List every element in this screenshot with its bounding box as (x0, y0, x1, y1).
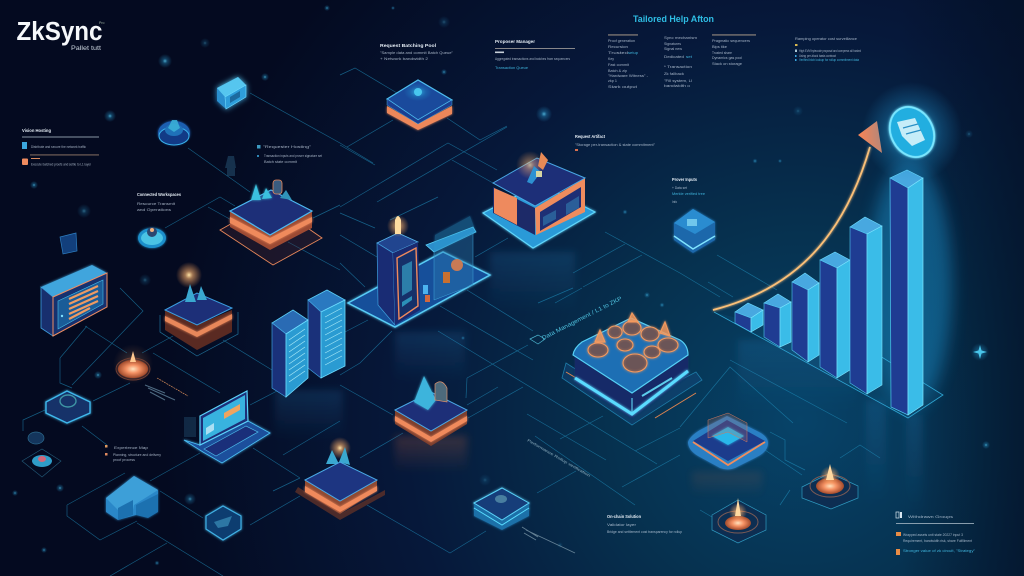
block: modular cube (106, 476, 158, 520)
server 1 (272, 310, 308, 397)
text block: column 3: Dynamics gas pool (712, 56, 742, 60)
text block: top centre note: Aggregated transactions and batches from sequencers (495, 57, 570, 61)
bar 6 (890, 170, 923, 415)
icon: document badge (60, 233, 77, 254)
text block: column 3: Trusted share (712, 51, 732, 55)
text block: upper node note: "Requester Hosting" (263, 145, 312, 149)
text block: column 1: Key (608, 57, 614, 61)
glass box (423, 216, 476, 302)
text block: upper node note: Transaction inputs and prover signature set (264, 154, 322, 158)
title: ZkSync logo: Pro (99, 21, 104, 25)
node: small disc (138, 227, 166, 248)
text block: lower left note: Experience Map (114, 446, 148, 450)
text block: column 1: Fast commit (608, 63, 629, 67)
icon: glowing coin (862, 82, 962, 182)
node: lower hex badge (206, 506, 241, 540)
text block: lower centre note: Validator layer (607, 523, 637, 527)
text block: top right note: Verified blob lookup for rollup commitment data (799, 58, 859, 62)
text block: column 2: set (686, 55, 692, 59)
text block: connected workspaces: Resource Transmit (137, 202, 175, 206)
text block: left legend (22, 128, 99, 166)
text block: bottom right legend: Requirement, bandwidth risk, share Fulfillment (903, 539, 972, 543)
text block: small cube note: Prover Inputs (672, 177, 697, 182)
text block: upper node note: Batch state commit (264, 160, 297, 164)
text block: top right note: High EVM bytecode proposal and compress all hosted (799, 49, 861, 53)
icon: disc node (158, 120, 190, 145)
text block: column 2: Zk fallback (664, 72, 684, 76)
icon: small blue cube (674, 209, 715, 253)
text block: top chip note: + Network bandwidth 2 (380, 57, 428, 61)
text block: column 2: * Transaction (664, 65, 692, 69)
text block: column 2: Signatures (664, 42, 681, 46)
text block: column 2: "Fill system, Ll (664, 79, 692, 83)
icon: blue data cube (217, 77, 246, 109)
text block: column 1 (608, 34, 649, 89)
text block: small cube note: Info (672, 200, 677, 204)
building on platform (483, 151, 595, 312)
big platform with orange flame cluster (562, 313, 702, 425)
server rack pair (272, 290, 345, 440)
text block: top chip note: Request Batching Pool (380, 43, 436, 48)
text block: small cube note: Merkle verified tree (672, 192, 705, 196)
bar reflections (738, 340, 923, 515)
text block: lower centre note: Bridge and settlement cost transparency for rollup (607, 530, 682, 534)
text block: top centre note (495, 39, 575, 70)
text block: building note (575, 134, 656, 151)
text block: left legend: Distribute and secure the network traffic (31, 145, 86, 149)
text block: column 1: Proof generation (608, 39, 635, 43)
flame node lower (712, 498, 766, 543)
chart: rising 3D bar chart (714, 160, 952, 515)
text block: bottom right legend: Stronger value of zk circuit, "Strategy" (903, 549, 976, 553)
title: ZkSync logo: ZkSync (16, 18, 102, 46)
text block: column 1: Trusted (608, 51, 628, 55)
text block: top right note: Ramping operator cost surveillance (795, 37, 857, 41)
panel: window screen (41, 265, 107, 336)
text block: column 1: Recursion (608, 45, 628, 49)
text block: column 2: Sync mechanism (664, 36, 697, 40)
tower body (377, 233, 420, 325)
isometric chip platform (387, 80, 452, 130)
text block: connected workspaces (137, 192, 181, 212)
text block: top chip note (380, 43, 454, 61)
laptop (184, 391, 270, 463)
text block: column 2: Dedicated (664, 55, 684, 59)
rotated caption: centre line: Performance Rollup verification (526, 438, 591, 478)
orange dashed label (157, 378, 188, 396)
text block: top chip note: "Sample data and commit Batch Queue" (380, 51, 454, 55)
text block: column 2: bandwidth o (664, 84, 690, 88)
text block: column 1: zkp 1 (608, 79, 617, 83)
text block: lower centre note: On-chain Solution (607, 514, 641, 519)
glow behind chart (868, 160, 952, 410)
text block: column 3: Pragmatic sequencers (712, 39, 750, 43)
bar 3 (792, 273, 819, 362)
scribbled caption below cube (522, 527, 575, 553)
icon: faint tower (225, 156, 236, 176)
isometric platform 1 (220, 180, 322, 265)
arrow: rising growth curve (713, 121, 882, 310)
text block: lower centre note (607, 514, 682, 534)
bar 4 (820, 252, 850, 378)
bar 5 (850, 217, 882, 394)
text block: top right note: Using per-block basis contract (799, 54, 836, 58)
text block: connected workspaces: Connected Workspaces (137, 192, 181, 197)
text block: connected workspaces: and Operations (137, 208, 171, 212)
orange flame cluster (588, 313, 678, 372)
text block: lower left note: proof process (113, 458, 135, 462)
text block: upper node note (257, 145, 322, 164)
node: flame disc (113, 344, 153, 384)
text block: column 3: Stack on storage (712, 62, 742, 66)
text block: bottom right legend: Wrapped assets unit state 20227 input 3 (903, 533, 963, 537)
base chip platform (688, 413, 768, 496)
text block: column 1: "Hardware Witness" - (608, 74, 649, 78)
sparkle: right star (971, 343, 989, 361)
bar 1 (735, 303, 763, 332)
text block: lower left note (105, 445, 161, 462)
isometric platform 4 with bulb (295, 437, 385, 520)
text block: bottom right legend (896, 512, 976, 555)
text block: building note: "Storage per-transaction & state commitment" (575, 143, 656, 147)
title: ZkSync logo: Pallet tutt (71, 45, 101, 52)
text block: left legend: Execute batched proofs and settle to L1 layer (31, 162, 92, 166)
isometric tower with glass box (348, 215, 490, 382)
text block: column 2: Signal new (664, 47, 682, 51)
isometric platform 3 (395, 376, 467, 472)
isometric cube platform (474, 488, 529, 530)
flame node right (802, 464, 858, 509)
text block: lower left note: Planning, structure and delivery (113, 453, 161, 457)
text block: small cube note: + Data set (672, 186, 687, 190)
scribbled label near flame (145, 385, 175, 400)
rotated caption: data management: Data Management / L1 to ZKP (541, 296, 623, 342)
flame on tower (395, 216, 401, 234)
text block: column 2 (664, 36, 697, 88)
server 2 (308, 290, 345, 378)
node: hexagon badge (46, 391, 90, 423)
text block: column 3 (712, 34, 756, 66)
text block: top centre note: Proposer Manager (495, 39, 535, 44)
text block: column 1: Stark output (608, 85, 637, 89)
text block: left legend: Vision Hosting (22, 128, 51, 133)
text block: top centre note: Transaction Queue (495, 66, 528, 70)
network connector lines (23, 68, 880, 576)
text block: top right note (795, 37, 861, 62)
bar 2 (764, 294, 791, 347)
text block: bottom right legend: Withdrawn Groups (908, 515, 953, 519)
rotated caption: data management (530, 296, 623, 344)
icon: small hex chips (22, 432, 61, 477)
text block: building note: Request Artifact (575, 134, 605, 139)
text block: column 1: Batch & zip (608, 69, 627, 73)
chart base plate (714, 312, 943, 418)
text block: column 3: Bips tike (712, 45, 727, 49)
text block: column 1: setup (628, 51, 638, 55)
isometric platform 2 with bulb (160, 262, 238, 356)
title: top centre heading: Tailored Help Afton (633, 14, 714, 24)
text block: small cube note (672, 177, 705, 204)
